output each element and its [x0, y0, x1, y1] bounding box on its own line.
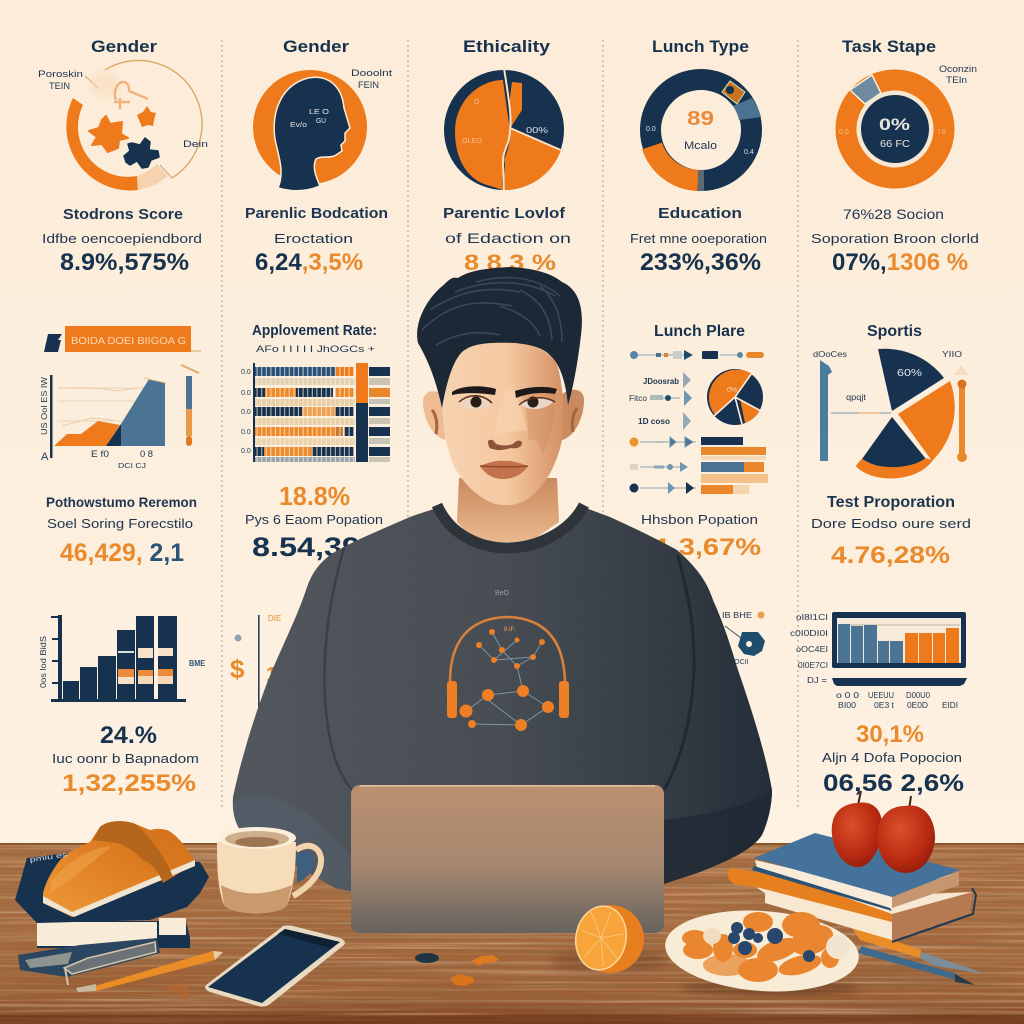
chart: exploded pie: 60% [897, 368, 922, 379]
laptop [351, 785, 664, 933]
heading: ethicality: Ethicality [463, 37, 551, 56]
bread: pmiu es [29, 852, 69, 864]
panel: improvement rate table [241, 322, 390, 562]
panel: ethnicity pie [443, 37, 571, 275]
small fragment beside sleeve: 1 [266, 664, 277, 686]
text: panel copy [42, 207, 202, 276]
chart: monitor bars: oOC4EI [796, 645, 828, 654]
text: panel copy: of Edaction on [445, 230, 571, 246]
chart: lunch donut [646, 80, 761, 191]
sweater [233, 505, 772, 892]
small crumbs [415, 953, 499, 986]
heading: Lunch Plare [654, 323, 745, 340]
panel: performance area chart [40, 326, 201, 567]
chart: banded table: 0.0 [241, 390, 251, 397]
text: panel copy [811, 494, 971, 569]
text: panel copy: Aljn 4 Dofa Popocion [822, 750, 962, 765]
chart: task donut: Oconzin [939, 64, 977, 75]
chart: navy bars: BME [189, 659, 206, 668]
heading: gender: Gender [283, 37, 349, 56]
chart: monitor bars: UEEUU [868, 691, 894, 700]
panel: stacked bar chart [39, 615, 206, 797]
shirt logo: headphones network: 8.IF. [504, 627, 516, 633]
text: panel copy [52, 722, 199, 797]
text: panel copy: Parentic Lovlof [443, 205, 566, 222]
chart: lunch donut: Mcalo [684, 140, 717, 152]
chart: task donut: 66 FC [880, 139, 910, 150]
text: panel copy: Education [658, 205, 742, 222]
text: panel copy: Hhsbon Popation [641, 512, 758, 527]
chart: ethnicity pie: OLEO [462, 138, 483, 145]
callout label: FEIN [358, 80, 379, 91]
chart: navy bars [39, 615, 206, 702]
chart: head silhouette: LE O [309, 109, 330, 116]
chart: area chart: 0 8 [140, 449, 153, 459]
text: panel copy [245, 205, 388, 276]
chart: area chart: A [41, 451, 49, 463]
text: panel copy: 8.54,39 [252, 532, 360, 562]
chart: area chart [40, 365, 199, 470]
eyes [459, 396, 555, 409]
upper book [752, 833, 960, 911]
apples [832, 791, 935, 873]
coffee mug [217, 827, 321, 913]
chart: monitor bars: oI8I1CI [796, 613, 828, 622]
panel: monitor chart [722, 611, 967, 797]
desk [0, 843, 1024, 1024]
panel: gender head donut [245, 37, 392, 276]
orange fruit [550, 902, 670, 974]
chart: lunch donut: 89 [687, 108, 714, 130]
text: panel copy: 6,24,3,5% [255, 249, 363, 276]
text: panel copy: 46,429, 2,1 [60, 539, 184, 567]
chart: lunch donut: 0.0 [646, 126, 656, 133]
subheading: AFo I I I I I JhOGCs + [256, 344, 375, 354]
chart: banded table: 0.0 [241, 429, 251, 436]
bread [29, 821, 195, 917]
small fragment beside sleeve: DIE [268, 614, 281, 623]
crumbs [166, 983, 190, 999]
heading: Applovement Rate: [252, 322, 377, 339]
student figure [233, 267, 772, 892]
chart: head silhouette [253, 70, 367, 191]
small fragment beside sleeve: $ [230, 654, 245, 684]
callout labels [813, 349, 962, 359]
text: panel copy [630, 205, 767, 276]
chart: monitor bars: 0E3 t [874, 701, 895, 710]
text: panel copy: 06,56 2,6% [823, 770, 964, 797]
pencils [850, 925, 985, 985]
text: panel copy: Iuc oonr b Bapnadom [52, 751, 199, 766]
lower book [728, 868, 976, 942]
chart: area chart: US OoI ES IW [40, 376, 49, 435]
text: panel copy [245, 481, 383, 562]
callout label: Dooolnt [351, 68, 392, 79]
banner heading [44, 326, 201, 352]
callout labels: TEIN [49, 81, 70, 92]
chart: exploded pie [831, 349, 955, 477]
chart: monitor bars: D00U0 [906, 691, 931, 700]
heading: gender: Gender [91, 37, 157, 56]
diagram: arrow rows: Fitco [629, 394, 648, 403]
callout labels: Dein [183, 139, 208, 150]
chart: small pie: 0% [727, 387, 737, 394]
text: panel copy: 1,32,255% [62, 770, 196, 797]
chart: ethnicity pie [444, 68, 564, 191]
text: panel copy: 233%,36% [640, 249, 761, 276]
chart: banded table: 0.0 [241, 369, 251, 376]
chart: task donut: 0% [879, 115, 910, 134]
callout labels [38, 69, 208, 150]
chart: monitor bars: 0I0E7CI [798, 661, 828, 670]
chart: monitor bars: 0E0D [907, 701, 928, 710]
text: panel copy: Pys 6 Eaom Popation [245, 512, 383, 527]
text: panel copy: Pothowstumo Reremon [46, 494, 197, 510]
text: panel copy: 11 3,67% [640, 534, 761, 561]
text: panel copy: Test Proporation [827, 494, 955, 511]
heading: Sportis [867, 323, 922, 340]
chart: banded table [241, 363, 390, 462]
chart: small pie [707, 369, 763, 425]
icon: blue up arrow [820, 360, 832, 461]
icon: gear: OCII [734, 659, 748, 666]
left desk items [15, 821, 499, 1007]
text: panel copy: Soel Soring Forecstilo [47, 516, 193, 531]
plate of snacks [662, 904, 862, 998]
callout label [351, 68, 392, 91]
text: panel copy: Parenlic Bodcation [245, 205, 388, 222]
column dividers [222, 40, 798, 810]
chart: monitor bars: DJ = [807, 676, 827, 685]
nose [488, 440, 522, 450]
chart: head silhouette: Ev/o [290, 122, 307, 129]
chart: ethnicity pie: O [474, 99, 480, 106]
chart: monitor bars [790, 612, 967, 710]
hair [417, 267, 582, 408]
phone [205, 926, 345, 1007]
diagram: arrow rows: JDoosrab [643, 377, 679, 386]
text: panel copy: Dore Eodso oure serd [811, 516, 971, 531]
chart: task donut [839, 64, 977, 178]
chart: monitor bars: BI00 [838, 701, 857, 710]
chart: monitor bars: c0I0DI0I [790, 629, 828, 638]
heading: lunch type: Lunch Type [652, 37, 749, 56]
text: panel copy [811, 206, 979, 276]
shirt logo: headphones network [447, 590, 569, 731]
text: panel copy: Stodrons Score [63, 207, 183, 223]
text: panel copy: 8.9%,575% [60, 249, 189, 276]
text: panel copy: Idfbe oencoepiendbord [42, 231, 202, 246]
text: panel copy: 4.76,28% [831, 542, 950, 569]
panel: task shape donut [811, 37, 979, 276]
chart: puzzle ring [66, 60, 202, 190]
text: panel copy [640, 512, 761, 561]
pencil [76, 951, 223, 992]
text: panel copy: 76%28 Socion [843, 206, 944, 222]
text: panel copy: Soporation Broon clorld [811, 231, 979, 246]
diagram: arrow rows: 1D coso [638, 417, 670, 426]
lips [480, 461, 528, 479]
chart: lunch donut: 0.4 [744, 149, 754, 156]
heading: task stape: Task Stape [842, 37, 936, 56]
text: panel copy: Fret mne ooeporation [630, 232, 767, 246]
chart: area chart: E f0 [91, 449, 109, 459]
neck [457, 478, 559, 542]
callout labels: Poroskin [38, 69, 83, 80]
chart: monitor bars: o 0 0 [836, 691, 860, 700]
chart: task donut: 0.0 [839, 129, 849, 136]
glasses [18, 938, 160, 985]
panel: lunch type donut [630, 37, 767, 276]
diagram: arrow rows [629, 350, 764, 494]
icon: gear [722, 611, 765, 666]
eyebrows [452, 386, 557, 398]
text: panel copy [443, 205, 571, 275]
panel: sports pie [811, 323, 971, 569]
ears [423, 390, 584, 440]
chart: area chart: DCI CJ [118, 463, 146, 470]
callout labels: dOoCes [813, 349, 847, 359]
text: panel copy: 24.% [100, 722, 157, 749]
notebook stack [37, 918, 190, 948]
chart: navy bars: 0os lod BidS [39, 636, 48, 688]
dark cloth [15, 853, 209, 923]
chart: task donut: TEIn [946, 75, 967, 86]
chart: monitor bars: EIDI [942, 701, 958, 710]
text: panel copy: 18.8% [279, 481, 350, 511]
icon: gear: IB BHE [722, 611, 752, 620]
chart: head silhouette: GU [316, 118, 326, 125]
chart: bars [701, 437, 768, 494]
panel: lunch plan flow [629, 323, 768, 561]
shirt logo: headphones network: BeO [495, 590, 510, 597]
small fragment beside sleeve [230, 614, 281, 707]
right desk items [550, 791, 985, 998]
text: panel copy [46, 494, 197, 567]
chart: exploded pie: qpqjt [846, 393, 867, 402]
panel: gender puzzle donut [38, 37, 208, 276]
text: panel copy: Eroctation [274, 231, 353, 246]
chart: banded table: 0.0 [241, 448, 251, 455]
banner heading: BOIDA DOEI BIIGOA G [71, 336, 186, 347]
chart: task donut: I 0 [938, 129, 946, 136]
callout labels: YIIO [942, 349, 962, 359]
chart: ethnicity pie: 00% [526, 126, 548, 135]
text: panel copy: 8 8 3 % [464, 250, 556, 275]
icon: orange gauge [954, 365, 969, 462]
chart: banded table: 0.0 [241, 409, 251, 416]
text: panel copy: 07%,1306 % [832, 249, 968, 276]
text: panel copy: 30,1% [856, 721, 924, 748]
text: panel copy [822, 721, 964, 797]
face [442, 338, 564, 505]
